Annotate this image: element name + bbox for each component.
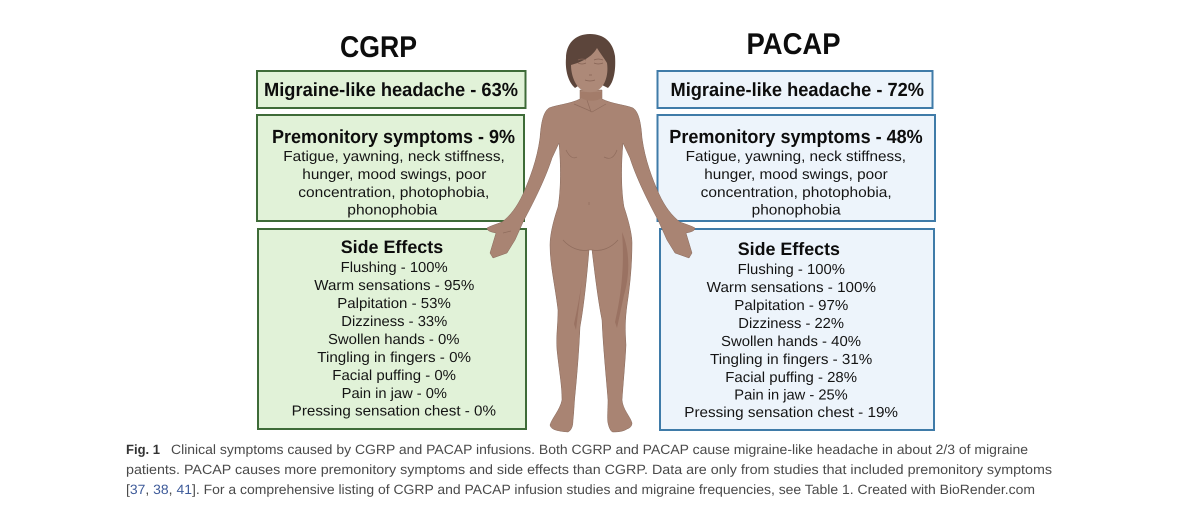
side effect list <box>684 262 898 421</box>
symptom list: concentration, photophobia, <box>701 185 892 201</box>
heading: Side Effects <box>341 237 443 257</box>
symptom list <box>686 149 906 218</box>
side effect list: Warm sensations - 100% <box>707 280 876 296</box>
symptom list: concentration, photophobia, <box>298 185 489 201</box>
side effect list: Facial puffing - 28% <box>725 370 857 386</box>
caption <box>126 442 1052 497</box>
side effect list: Pain in jaw - 0% <box>342 386 447 402</box>
side effect list: Warm sensations - 95% <box>314 278 474 294</box>
symptom list: hunger, mood swings, poor <box>704 167 888 183</box>
side effect list: Swollen hands - 40% <box>721 334 861 350</box>
symptom list <box>283 149 505 218</box>
symptom list: Fatigue, yawning, neck stiffness, <box>686 149 906 165</box>
symptom list: phonophobia <box>347 202 438 218</box>
title: CGRP: CGRP <box>340 31 417 64</box>
side effect list: Flushing - 100% <box>341 260 448 276</box>
side effect list: Flushing - 100% <box>738 262 845 278</box>
side effect list: Swollen hands - 0% <box>328 332 460 348</box>
caption: [37, 38, 41]. For a comprehensive listing of CGRP and PACAP infusion studies and migraine frequencies, see Table 1. Created with BioRender.com <box>126 482 1035 497</box>
side effect list: Facial puffing - 0% <box>332 368 456 384</box>
side effect list: Pressing sensation chest - 0% <box>292 404 496 420</box>
heading: Migraine-like headache - 63% <box>264 80 518 101</box>
panel: PACAP migraine-like headache <box>658 71 932 108</box>
panel: CGRP premonitory symptoms <box>257 115 524 221</box>
title: PACAP: PACAP <box>746 28 840 61</box>
body silhouette <box>487 90 695 432</box>
side effect list: Tingling in fingers - 0% <box>317 350 471 366</box>
caption: patients. PACAP causes more premonitory symptoms and side effects than CGRP. Data are only from studies that included premonitory symptoms <box>126 462 1052 477</box>
side effect list: Pressing sensation chest - 19% <box>684 405 898 421</box>
hair <box>566 34 615 88</box>
side effect list: Pain in jaw - 25% <box>734 388 848 404</box>
caption: Fig. 1 <box>126 442 160 457</box>
symptom list: hunger, mood swings, poor <box>302 167 486 183</box>
side effect list: Palpitation - 53% <box>337 296 451 312</box>
heading: Side Effects <box>738 239 840 259</box>
figure: human body <box>487 34 695 432</box>
side effect list: Palpitation - 97% <box>734 298 848 314</box>
facial features <box>578 59 603 81</box>
caption: Clinical symptoms caused by CGRP and PACAP infusions. Both CGRP and PACAP cause migraine-like headache in about 2/3 of migraine <box>171 442 1028 457</box>
side effect list: Dizziness - 33% <box>341 314 447 330</box>
body contour lines <box>503 100 618 251</box>
heading: Premonitory symptoms - 9% <box>272 127 515 148</box>
side effect list <box>292 260 496 420</box>
side effect list: Dizziness - 22% <box>738 316 844 332</box>
neck shadow <box>580 92 602 101</box>
symptom list: phonophobia <box>752 202 842 218</box>
heading: Migraine-like headache - 72% <box>670 80 924 101</box>
symptom list: Fatigue, yawning, neck stiffness, <box>283 149 505 165</box>
panel: PACAP premonitory symptoms <box>658 115 935 221</box>
panel: CGRP side effects <box>258 229 526 429</box>
panel: PACAP side effects <box>660 229 934 430</box>
side effect list: Tingling in fingers - 31% <box>710 352 872 368</box>
panel: CGRP migraine-like headache <box>257 71 526 108</box>
body shading <box>574 232 628 330</box>
heading: Premonitory symptoms - 48% <box>669 127 923 148</box>
face <box>571 48 607 92</box>
